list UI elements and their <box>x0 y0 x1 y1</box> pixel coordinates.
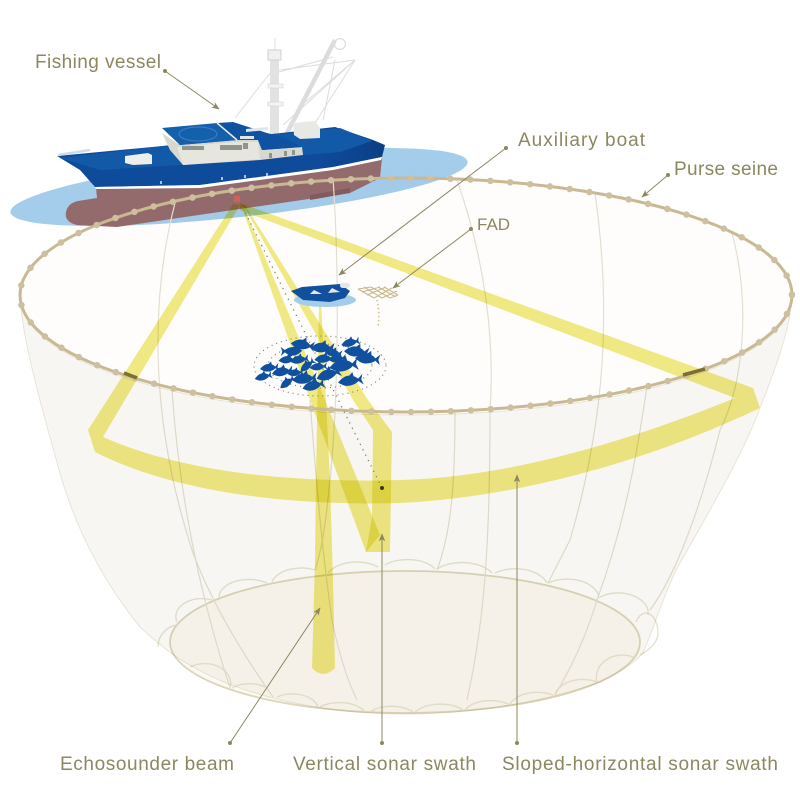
net back wall <box>20 179 792 714</box>
water surface around vessel <box>7 132 471 242</box>
echosounder beam <box>312 300 335 674</box>
dotted line to FAD depth marker <box>243 208 384 490</box>
label: Purse seine: Purse seine <box>674 159 778 180</box>
bow railing <box>58 150 90 155</box>
mast and rigging <box>235 38 355 133</box>
label: Vertical sonar swath: Vertical sonar swath <box>293 754 476 775</box>
fishing vessel <box>7 38 471 242</box>
helideck <box>162 123 237 145</box>
hull upper, blue <box>57 127 385 187</box>
vertical sonar swath <box>241 205 392 552</box>
sonar transducer <box>234 196 240 202</box>
fish school boundary <box>254 336 386 396</box>
label: Auxiliary boat: Auxiliary boat <box>518 130 646 151</box>
auxiliary boat <box>291 283 356 307</box>
fish school <box>253 334 381 393</box>
label: Echosounder beam: Echosounder beam <box>60 754 234 775</box>
label: Echosounder beam <box>60 608 320 775</box>
label: Fishing vessel <box>35 52 219 109</box>
superstructure <box>162 133 303 165</box>
label: Vertical sonar swath <box>293 534 476 775</box>
label: FAD <box>393 215 510 288</box>
label: Auxiliary boat <box>339 130 646 275</box>
label: Sloped-horizontal sonar swath: Sloped-horizontal sonar swath <box>502 754 778 775</box>
label: Sloped-horizontal sonar swath <box>502 475 778 775</box>
net scallops <box>158 560 658 712</box>
sloped-horizontal sonar swath <box>88 203 760 503</box>
hull scuppers <box>161 173 267 184</box>
net meridian lines <box>158 178 743 700</box>
net front wall <box>20 297 792 714</box>
label: Fishing vessel: Fishing vessel <box>35 52 161 73</box>
label: FAD: FAD <box>477 215 510 234</box>
deck boxes <box>125 153 152 165</box>
purse seine rim with floats <box>20 178 792 412</box>
FAD raft <box>358 287 398 327</box>
sonar and echosounder beams <box>88 203 760 674</box>
net floor <box>170 571 640 713</box>
label: Purse seine <box>642 159 778 197</box>
purse seine net <box>20 178 792 714</box>
hull lower, brown <box>66 158 382 227</box>
white stripe <box>95 157 382 189</box>
